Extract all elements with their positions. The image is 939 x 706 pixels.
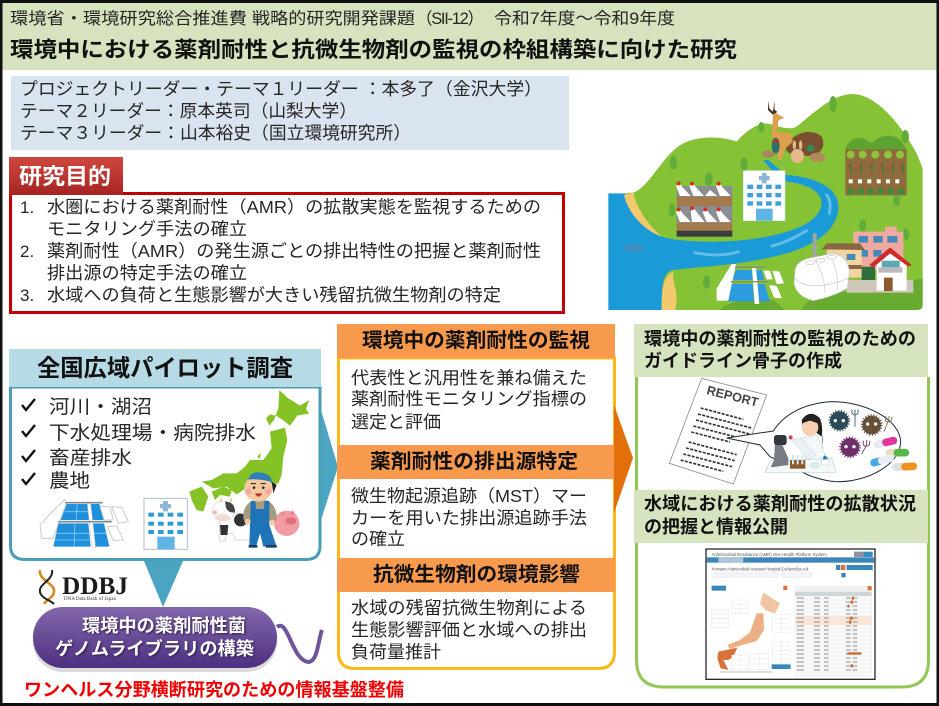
checklist: 下水処理場・病院排水 (49, 422, 256, 444)
research objectives box: 水域への負荷と生態影響が大きい残留抗微生物剤の特定 (47, 285, 501, 305)
theme 3 text (351, 598, 587, 662)
genome library pill: ゲノムライブラリの構築 (55, 638, 254, 659)
hospital (743, 171, 785, 221)
illustration: landscape (608, 94, 923, 310)
theme 1 heading (337, 324, 615, 358)
leaders panel (11, 76, 569, 150)
icon: scientist (765, 414, 836, 472)
theme 2 text (351, 486, 587, 549)
logo: DDBJ: DNA Data Bank of Japan (64, 597, 116, 602)
output 1 heading: ガイドライン骨子の作成 (644, 350, 842, 371)
leaders panel: テーマ３リーダー：山本裕史（国立環境研究所） (20, 123, 411, 143)
screenshot: AMR One Health Platform: Antimicrobial Resistance (AMR) One Health Platform System (712, 552, 827, 558)
theme 3 heading: 抗微生物剤の環境影響 (373, 563, 580, 586)
output 2 heading: 水域における薬剤耐性の拡散状況 (644, 494, 916, 514)
theme 1 text: 薬剤耐性モニタリング指標の (351, 389, 587, 409)
arrow: survey to genome library (144, 561, 183, 607)
checklist: 畜産排水 (49, 447, 132, 469)
crop field (845, 136, 907, 195)
research objectives tab (9, 157, 123, 195)
animals (762, 101, 825, 163)
icon: microbes (830, 409, 892, 457)
header band (2, 3, 937, 70)
theme 1 text: 代表性と汎用性を兼ね備えた (351, 368, 587, 388)
research objectives box: モニタリング手法の確立 (47, 219, 247, 239)
speech bubble (727, 402, 901, 482)
treatment plant (717, 264, 784, 304)
trees (669, 96, 909, 289)
leaders panel: プロジェクトリーダー・テーマ１リーダー ：本多了（金沢大学） (20, 79, 542, 99)
funding line: 令和7年度～令和9年度 (494, 9, 675, 28)
theme 3 text: 負荷量推計 (351, 642, 441, 662)
output 1 heading: 環境中の薬剤耐性の監視のための (644, 329, 916, 349)
research objectives box: 1. (20, 198, 34, 217)
funding line: 環境省・環境研究総合推進費 (10, 9, 247, 28)
research objectives box: 2. (20, 242, 34, 261)
theme 3 text: 水域の残留抗微生物剤による (351, 598, 587, 618)
icon: capsules (874, 441, 913, 467)
title: 環境中における薬剤耐性と抗微生物剤の監視の枠組構築に向けた研究 (10, 38, 738, 62)
theme 2 heading (337, 445, 615, 479)
funding line: 戦略的研究開発課題 (252, 9, 415, 28)
illustration: laboratory speech bubble (727, 402, 913, 482)
output 2 heading (634, 490, 928, 543)
panel heading: 全国広域パイロット調査 (37, 355, 293, 381)
map (717, 593, 780, 670)
panel: outputs (634, 324, 928, 687)
research objectives box: 排出源の特定手法の確立 (47, 263, 247, 283)
tanks (794, 253, 849, 301)
theme 2 text: カーを用いた排出源追跡手法 (351, 508, 587, 528)
funding line: （SII-12） (416, 9, 484, 28)
icon: pig (274, 510, 299, 536)
checklist: 農地 (49, 470, 90, 492)
icon: hospital (144, 498, 187, 549)
checklist: 河川・湖沼 (49, 396, 152, 418)
funding line (10, 9, 675, 28)
logo: DDBJ (40, 570, 128, 604)
theme 1 text (351, 368, 587, 432)
research objectives box: 水圏における薬剤耐性（AMR）の拡散実態を監視するための (47, 197, 541, 217)
one health caption: ワンヘルス分野横断研究のための情報基盤整備 (24, 680, 404, 700)
arrow: themes to outputs (614, 405, 633, 513)
icon: treatment plant (40, 499, 128, 548)
icon: cow (212, 497, 252, 541)
research objectives box: 3. (20, 286, 34, 305)
research objectives tab: 研究目的 (19, 164, 111, 189)
screenshot: AMR One Health Platform (706, 549, 875, 679)
theme 1 text: 選定と評価 (351, 412, 441, 432)
illustrations: Japan map, cow, farmer, pig (189, 390, 309, 548)
poultry house (676, 181, 732, 237)
output 1 heading (634, 324, 928, 377)
research objectives box: 薬剤耐性（AMR）の発生源ごとの排出特性の把握と薬剤耐性 (47, 241, 541, 261)
theme 2 heading: 薬剤耐性の排出源特定 (370, 450, 578, 473)
leaders panel: テーマ２リーダー：原本英司（山梨大学） (20, 101, 357, 121)
arrow: survey to themes (321, 410, 338, 520)
checklist (22, 396, 256, 492)
icon: report (669, 378, 767, 484)
icon: report: REPORT (705, 383, 760, 410)
screenshot: AMR One Health Platform: Humans Antimicrobial-resistant Hospital Escherichia coli (712, 567, 808, 572)
theme 2 text: の確立 (351, 529, 405, 549)
logo: DDBJ: DDBJ (62, 573, 128, 600)
genome library pill (33, 607, 322, 672)
theme 3 text: 生態影響評価と水域への排出 (351, 620, 587, 640)
output 2 heading: の把握と情報公開 (644, 517, 788, 537)
research objectives box (10, 194, 564, 312)
icon: farmer (243, 472, 277, 548)
genome library pill: 環境中の薬剤耐性菌 (82, 616, 246, 636)
theme 1 heading: 環境中の薬剤耐性の監視 (362, 329, 590, 352)
icon: Japan map (189, 390, 309, 512)
data table (795, 586, 872, 675)
panel: nationwide pilot survey (9, 349, 338, 607)
panel: research themes (337, 324, 615, 668)
region tables (712, 600, 790, 670)
theme 2 text: 微生物起源追跡（MST）マー (351, 486, 587, 506)
buildings (813, 227, 913, 293)
theme 3 heading (337, 558, 615, 592)
